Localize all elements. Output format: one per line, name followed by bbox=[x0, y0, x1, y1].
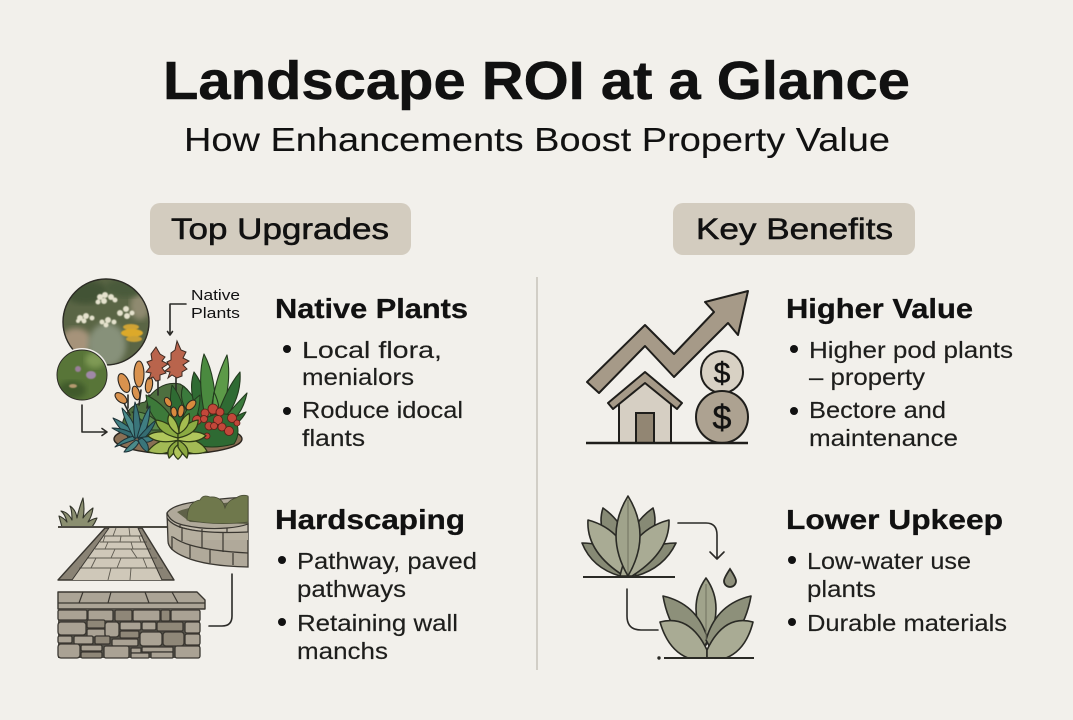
text: higher value: Bectore and bbox=[809, 397, 946, 423]
stone wall bbox=[58, 592, 205, 658]
paved path bbox=[58, 528, 174, 580]
connector line bbox=[209, 574, 232, 626]
text: native plants: flants bbox=[302, 425, 365, 451]
agave plant: lower bbox=[658, 578, 754, 659]
text: native plants: Native Plants bbox=[275, 293, 468, 324]
text: hardscaping bbox=[275, 504, 477, 664]
text: hardscaping: Retaining wall bbox=[297, 610, 458, 636]
heading pill: key benefits bbox=[673, 203, 915, 255]
coin: small bbox=[701, 351, 743, 393]
subtitle: How Enhancements Boost Property Value bbox=[184, 121, 890, 158]
text: higher value: Higher pod plants bbox=[809, 337, 1013, 363]
heading pill: key benefits: Key Benefits bbox=[696, 213, 893, 246]
ground line bbox=[586, 442, 748, 444]
shrubs behind wall bbox=[187, 495, 248, 524]
photo: small purple flower circle bbox=[55, 348, 109, 402]
mid green foliage bbox=[132, 385, 200, 432]
icon: water drop bbox=[724, 569, 736, 587]
heading pill: top upgrades: Top Upgrades bbox=[171, 213, 389, 246]
rising arrow bbox=[587, 291, 748, 393]
curved retaining wall bbox=[167, 495, 248, 567]
icon: hardscaping illustration bbox=[58, 495, 248, 658]
teal spiky plant bbox=[112, 402, 158, 452]
arrow: photo to bed bbox=[82, 405, 107, 436]
text: higher value: Higher Value bbox=[786, 293, 973, 324]
text: lower upkeep bbox=[786, 504, 1007, 636]
label: native plants: Plants bbox=[191, 306, 240, 322]
label: native plants bbox=[191, 288, 240, 322]
text: lower upkeep: Lower Upkeep bbox=[786, 504, 1003, 535]
agave plant: upper bbox=[582, 496, 676, 577]
coin: large bbox=[696, 391, 748, 443]
text: higher value: maintenance bbox=[809, 425, 958, 451]
icon: higher value house, arrow and coins bbox=[586, 291, 748, 443]
text: hardscaping: manchs bbox=[297, 638, 388, 664]
text: native plants: menialors bbox=[302, 364, 414, 390]
icon: native plants illustration bbox=[55, 278, 247, 459]
grass tuft bbox=[59, 498, 97, 527]
text: lower upkeep: Durable materials bbox=[807, 610, 1007, 636]
photo: large wildflower circle bbox=[60, 278, 152, 367]
house bbox=[608, 372, 682, 443]
text: lower upkeep: plants bbox=[807, 576, 876, 602]
text: higher value: – property bbox=[809, 364, 925, 390]
red flower shrub bbox=[192, 404, 240, 447]
small orange buds bbox=[163, 396, 198, 417]
background shrub bbox=[122, 383, 196, 438]
heading pill: top upgrades bbox=[150, 203, 411, 255]
arrow: label to plants bbox=[168, 304, 186, 335]
label: native plants: Native bbox=[191, 288, 240, 304]
text: native plants: Roduce idocal bbox=[302, 397, 463, 423]
ground line bbox=[58, 526, 168, 528]
text: hardscaping: Hardscaping bbox=[275, 504, 465, 535]
coin: large: $ bbox=[713, 399, 732, 437]
text: hardscaping: pathways bbox=[297, 576, 406, 602]
connector line bbox=[627, 589, 658, 630]
red flower spikes bbox=[146, 341, 189, 400]
text: native plants: Local flora, bbox=[302, 337, 442, 363]
orange flower spikes bbox=[113, 361, 154, 415]
text: lower upkeep: Low-water use bbox=[807, 548, 971, 574]
text: higher value bbox=[786, 293, 1013, 451]
coin: small: $ bbox=[714, 357, 731, 390]
lime hosta plant bbox=[148, 413, 207, 459]
plant bed bbox=[112, 341, 247, 459]
title: Landscape ROI at a Glance bbox=[163, 51, 910, 111]
text: native plants bbox=[275, 293, 468, 451]
tall green spiky plant bbox=[181, 354, 247, 431]
arrow: to water drop bbox=[678, 523, 724, 559]
icon: lower upkeep agave plants bbox=[582, 496, 754, 659]
text: hardscaping: Pathway, paved bbox=[297, 548, 477, 574]
